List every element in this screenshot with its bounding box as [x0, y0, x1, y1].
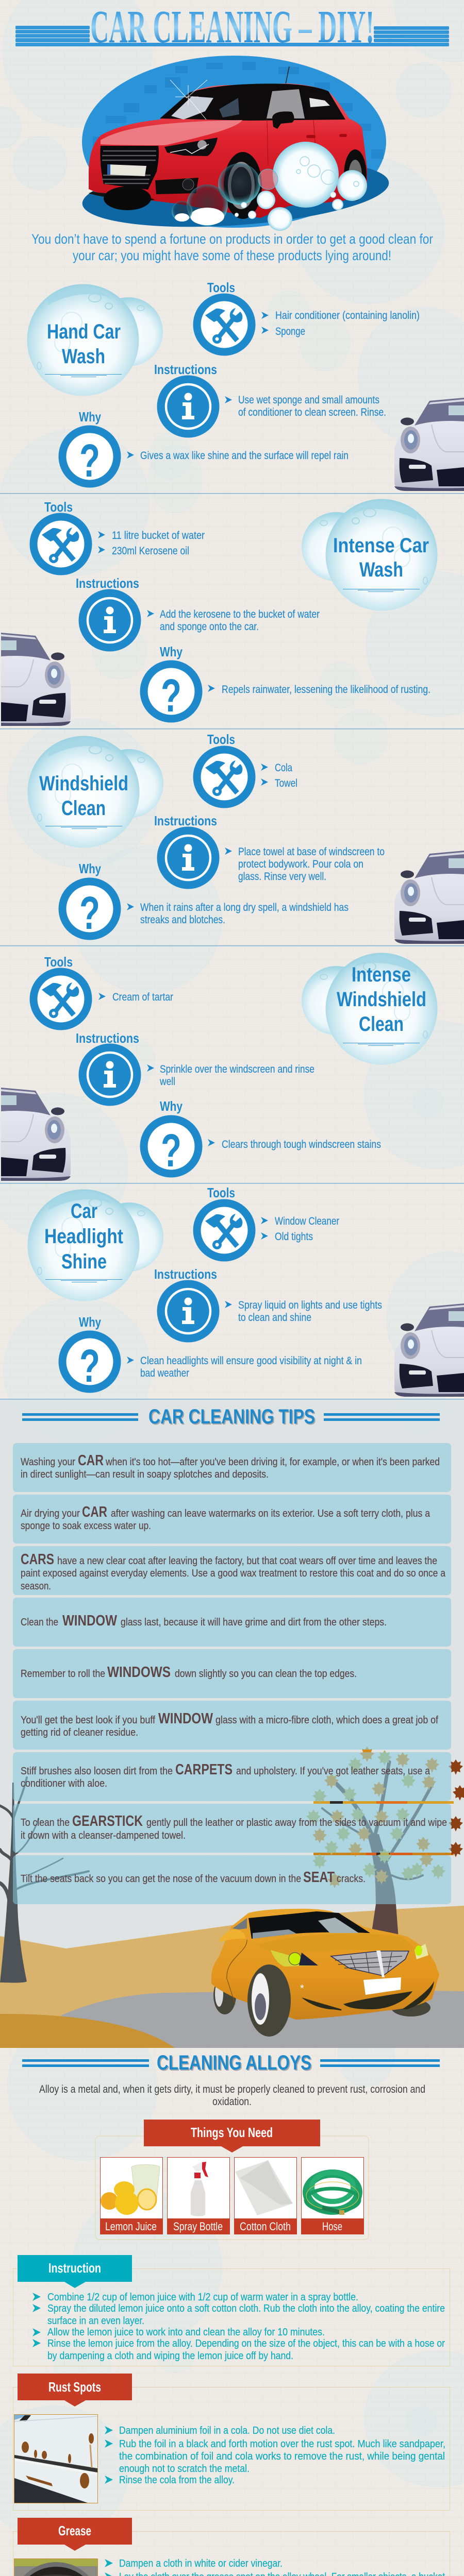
icon: question mark: ?	[79, 435, 100, 487]
heading: why: Why	[79, 409, 101, 425]
card: spray bottle: Spray Bottle	[173, 2220, 223, 2233]
bubble: car headlight shine title: Shine	[61, 1250, 107, 1273]
heading: car cleaning tips	[22, 1405, 440, 1429]
icon: instructions	[157, 826, 220, 889]
panel: tip 1	[13, 1443, 451, 1492]
bubble: hand car wash title	[27, 284, 163, 396]
heading: instructions: Instructions	[154, 813, 217, 828]
sparkle	[170, 80, 207, 120]
headlight	[164, 138, 218, 156]
panel: tip 9: cracks.	[337, 1873, 366, 1885]
icon: instructions	[157, 375, 220, 438]
bubble: windshield clean title: Windshield	[39, 772, 128, 795]
headlights	[271, 1950, 318, 1967]
panel: tip 8	[13, 1804, 451, 1853]
why text: bad weather	[140, 1367, 189, 1379]
mirror	[219, 1929, 245, 1942]
icon: tools	[30, 968, 92, 1030]
heading: cleaning alloys: CLEANING ALLOYS	[157, 2052, 311, 2074]
illustration: orange car	[211, 1909, 439, 2037]
black roof and windshield	[160, 83, 345, 121]
mirror	[272, 111, 294, 129]
bubble: intense windshield clean title: Clean	[359, 1013, 404, 1036]
panel: tip 2: sponge to soak excess water up.	[21, 1520, 151, 1532]
why text: Clears through tough windscreen stains	[222, 1139, 381, 1150]
heading: cleaning alloys	[22, 2052, 440, 2075]
antenna	[286, 66, 289, 84]
icon: question mark: ?	[79, 888, 100, 939]
why text	[127, 902, 349, 926]
bubble: car headlight shine title	[28, 1189, 163, 1301]
road	[61, 1991, 464, 2048]
photo: greasy alloy wheel	[14, 2558, 98, 2576]
panel: tip 8: it down with a cleanser-dampened towel.	[21, 1829, 186, 1841]
tag: rust spots: Rust Spots	[48, 2379, 101, 2395]
icon: tools	[30, 513, 92, 575]
side window	[233, 1918, 247, 1929]
title banner	[15, 2, 449, 53]
tag: grease	[18, 2518, 132, 2551]
panel: intense car wash	[1, 499, 437, 726]
panel: grease	[13, 2518, 450, 2576]
foliage	[306, 1747, 464, 1888]
panel: tip 5	[13, 1649, 451, 1698]
intro text	[31, 231, 433, 263]
panel: tip 4	[13, 1598, 451, 1647]
bubble: intense car wash title: Intense Car	[333, 534, 429, 557]
panel: tip 6	[13, 1701, 451, 1750]
soap bubbles	[172, 142, 367, 231]
icon: instructions	[78, 589, 141, 651]
icon: question mark: ?	[161, 1125, 181, 1177]
tools list	[261, 1215, 339, 1243]
divider	[0, 1183, 464, 1184]
panel: tip 1: CAR	[78, 1452, 104, 1469]
panel: things you need	[95, 2120, 369, 2240]
panel: tip 8: GEARSTICK	[72, 1813, 143, 1829]
mosaic tiles	[93, 62, 384, 159]
card: cotton cloth: Cotton Cloth	[240, 2220, 291, 2233]
heading: tools: Tools	[207, 732, 235, 747]
stripes	[22, 2059, 440, 2067]
rust spots list: Dampen aluminium foil in a cola. Do not use diet cola.	[119, 2425, 335, 2436]
panel: tip 2: CAR	[82, 1504, 107, 1520]
why text: When it rains after a long dry spell, a windshield has	[140, 902, 349, 913]
heading: instructions: Instructions	[154, 362, 217, 377]
panel: tip 1: Washing your	[21, 1456, 75, 1468]
why text: Gives a wax like shine and the surface will repel rain	[140, 450, 349, 462]
panel: tip 9: Tilt the seats back so you can get the nose of the vacuum down in the	[21, 1873, 301, 1885]
bubble: intense windshield clean title	[302, 953, 437, 1064]
panel: tip 4: WINDOW	[62, 1613, 118, 1629]
licence plate	[363, 1977, 401, 1995]
panel: tip 3	[13, 1546, 451, 1595]
tools list	[98, 530, 205, 557]
silver car	[1, 633, 71, 726]
tag: grease: Grease	[58, 2523, 91, 2538]
rear wheel	[213, 1976, 236, 2014]
rust spots list: the combination of foil and cola works to remove the rust, while being gental	[119, 2450, 445, 2462]
tools list	[261, 762, 297, 789]
tools list: Hair conditioner (containing lanolin)	[275, 310, 420, 321]
instructions text: well	[159, 1076, 175, 1088]
alloys intro text	[39, 2083, 425, 2108]
tools list: Sponge	[275, 326, 305, 337]
instructions text: Use wet sponge and small amounts	[238, 394, 379, 406]
panel: tip 9: SEAT	[303, 1869, 335, 1886]
panel: tip 3: CARS	[21, 1551, 54, 1568]
blue disc backdrop	[82, 56, 386, 228]
icon: question mark: ?	[79, 1341, 100, 1392]
heading: instructions: Instructions	[76, 1030, 139, 1046]
silver car	[394, 851, 464, 944]
why text: Repels rainwater, lessening the likelihood of rusting.	[222, 684, 430, 696]
instruction list: Combine 1/2 cup of lemon juice with 1/2 cup of warm water in a spray bottle.	[47, 2291, 358, 2303]
photo: rusty door	[14, 2414, 98, 2503]
lower intakes	[343, 1991, 412, 2009]
panel: instruction	[13, 2255, 450, 2366]
tips section background	[0, 1399, 464, 2048]
hero illustration: red car with soap bubbles	[80, 56, 391, 236]
heading: tools: Tools	[207, 1185, 235, 1200]
heading: tools: Tools	[44, 954, 73, 970]
rust spots list: Rinse the cola from the alloy.	[119, 2474, 235, 2486]
icon: question mark: ?	[161, 670, 181, 722]
door handles	[306, 135, 316, 138]
tag: rust spots	[18, 2374, 132, 2406]
instructions text	[225, 394, 386, 418]
instructions text: to clean and shine	[238, 1312, 311, 1324]
heading: instructions: Instructions	[154, 1266, 217, 1282]
panel: tip 2: Air drying your	[21, 1507, 80, 1519]
panel: tip 5: Remember to roll the	[21, 1668, 105, 1680]
panel: car headlight shine	[28, 1185, 464, 1397]
bubble: car headlight shine title: Car	[71, 1200, 97, 1223]
grease list	[105, 2557, 445, 2576]
tools list: 230ml Kerosene oil	[112, 545, 189, 557]
panel: intense windshield clean	[1, 953, 437, 1181]
instruction list: surface in an even layer.	[47, 2315, 144, 2327]
bubble: hand car wash title: Hand Car	[47, 320, 121, 343]
tools list	[261, 310, 420, 337]
icon: question mark	[59, 878, 121, 940]
windshield	[248, 1911, 370, 1939]
wheels	[104, 187, 151, 210]
heading: why: Why	[160, 644, 183, 659]
panel: tip 8: To clean the	[21, 1817, 70, 1828]
tag: things you need: Things You Need	[191, 2125, 273, 2140]
icon: question mark	[140, 660, 202, 722]
foreground hill	[0, 2014, 175, 2048]
instruction list: by dampening a cloth and wiping the lemon juice off by hand.	[47, 2350, 293, 2362]
tools list: Old tights	[275, 1231, 313, 1243]
divider	[0, 728, 464, 730]
instructions text: Sprinkle over the windscreen and rinse	[160, 1063, 314, 1075]
panel: tip 6: WINDOW	[158, 1710, 213, 1727]
divider	[0, 945, 464, 946]
panel: windshield clean	[28, 732, 464, 944]
ground shadow	[80, 150, 391, 236]
panel: tip 7: conditioner with aloe.	[21, 1777, 107, 1789]
bubble: windshield clean title: Clean	[61, 797, 106, 820]
bubble: intense windshield clean title: Windshield	[337, 988, 426, 1011]
panel: tip 5: WINDOWS	[107, 1664, 171, 1681]
tools list: Cola	[275, 762, 292, 774]
instructions text: of conditioner to clean screen. Rinse.	[238, 406, 386, 418]
side windows	[267, 89, 305, 118]
body	[211, 1909, 439, 2020]
tag: things you need	[144, 2120, 320, 2153]
icon: tools	[193, 294, 256, 355]
banner stripes	[15, 26, 449, 46]
intro text: your car; you might have some of these products lying around!	[73, 248, 391, 263]
panel: tip 4: glass last, because it will have grime and dirt from the other steps.	[121, 1616, 387, 1628]
hood highlight	[101, 120, 242, 145]
heading: car cleaning tips: CAR CLEANING TIPS	[148, 1405, 315, 1428]
instructions text	[147, 1063, 314, 1088]
tools list: Towel	[275, 777, 297, 789]
icon: tools	[193, 746, 256, 808]
panel: tip 9	[13, 1855, 451, 1904]
bubble: intense car wash title: Wash	[359, 558, 403, 581]
bubble: windshield clean title	[28, 736, 163, 848]
icon: question mark	[140, 1115, 202, 1178]
card: hose	[301, 2158, 364, 2234]
instructions text	[147, 608, 320, 633]
silver car	[394, 1303, 464, 1397]
silver car	[394, 398, 464, 491]
instruction list	[32, 2291, 445, 2362]
instructions text: Add the kerosene to the bucket of water	[160, 608, 320, 620]
panel: tip 7	[13, 1752, 451, 1801]
instructions text: glass. Rinse very well.	[238, 871, 326, 883]
rust spots list: enough not to scratch the metal.	[119, 2463, 250, 2475]
panel: tip 3: season.	[21, 1580, 51, 1592]
instructions text: Place towel at base of windscreen to	[238, 846, 385, 858]
icon: tools	[193, 1199, 256, 1261]
card: spray bottle	[167, 2158, 230, 2234]
card: lemon juice: Lemon Juice	[105, 2220, 157, 2233]
panel: tip 5: down slightly so you can clean the top edges.	[175, 1668, 357, 1680]
heading: why: Why	[160, 1098, 183, 1114]
heading: cleaning alloys: CLEANING ALLOYS	[158, 2053, 312, 2075]
icon: question mark	[59, 426, 121, 487]
divider	[0, 493, 464, 494]
badge: *	[300, 1983, 304, 1994]
heading: instructions: Instructions	[76, 575, 139, 591]
panel: tip 1: in direct sunlight—can result in soapy splotches and deposits.	[21, 1468, 269, 1480]
instructions text: protect bodywork. Pour cola on	[238, 858, 363, 870]
panel: hand car wash	[27, 280, 464, 491]
car body	[89, 83, 367, 218]
instruction list: Allow the lemon juice to work into and clean the alloy for 10 minutes.	[47, 2326, 325, 2338]
panel: tip 7: CARPETS	[175, 1761, 233, 1778]
far front wheel	[391, 1999, 430, 2016]
rust spots list	[105, 2425, 445, 2486]
why text: streaks and blotches.	[140, 914, 225, 926]
alloys intro text: oxidation.	[212, 2096, 252, 2108]
left tree	[0, 1777, 89, 1982]
heading: tools: Tools	[44, 499, 73, 515]
heading: why: Why	[79, 1314, 101, 1330]
icon: question mark	[59, 1330, 121, 1393]
front wheel	[247, 1964, 291, 2037]
panel: rust spots	[13, 2374, 450, 2510]
panel: tip 4: Clean the	[21, 1616, 58, 1628]
icon: instructions	[157, 1280, 220, 1343]
instructions text: Spray liquid on lights and use tights	[238, 1299, 382, 1311]
card: hose: Hose	[322, 2220, 342, 2233]
hood	[258, 1934, 412, 1958]
licence plate	[107, 164, 146, 176]
grille	[100, 146, 159, 190]
bubble: hand car wash title: Wash	[62, 345, 105, 368]
tools list: Cream of tartar	[112, 991, 173, 1003]
bubble: intense car wash title	[302, 499, 437, 611]
panel: tip 6: getting rid of cleaner residue.	[21, 1726, 138, 1738]
bubble: car headlight shine title: Headlight	[44, 1225, 123, 1248]
door line	[227, 1940, 247, 2004]
tag: instruction	[18, 2255, 132, 2288]
why text: Clean headlights will ensure good visibility at night & in	[140, 1355, 362, 1367]
panel: tip 2	[13, 1495, 451, 1544]
panel: tip 7: Stiff brushes also loosen dirt from the	[21, 1765, 173, 1777]
instructions text: and sponge onto the car.	[160, 621, 259, 633]
why text	[127, 1355, 362, 1379]
panel: tip 7: and upholstery. If you've got leather seats, use a	[236, 1765, 430, 1777]
instructions text	[225, 846, 385, 883]
card: lemon juice	[100, 2158, 163, 2234]
tan hills	[0, 1906, 464, 2048]
card: cotton cloth	[234, 2158, 297, 2234]
landscape illustration	[0, 1747, 464, 2048]
grease list: Dampen a cloth in white or cider vinegar.	[119, 2557, 283, 2569]
tools list: Window Cleaner	[275, 1215, 339, 1227]
stripes	[22, 1413, 440, 1421]
tag: instruction: Instruction	[48, 2260, 101, 2276]
heading: tools: Tools	[207, 280, 235, 295]
right tree trunk and branches	[322, 1762, 433, 1953]
bubble: intense windshield clean title: Intense	[352, 963, 411, 986]
panel: tip 6: You'll get the best look if you buff	[21, 1714, 155, 1726]
lower air intake and fog lamp	[155, 178, 198, 194]
instructions text	[225, 1299, 382, 1324]
tools list: 11 litre bucket of water	[112, 530, 205, 541]
heading: why: Why	[79, 861, 101, 876]
grille	[331, 1951, 409, 1976]
icon: instructions	[78, 1044, 141, 1106]
heading: car cleaning tips: CAR CLEANING TIPS	[150, 1406, 316, 1429]
silver car	[1, 1088, 71, 1181]
